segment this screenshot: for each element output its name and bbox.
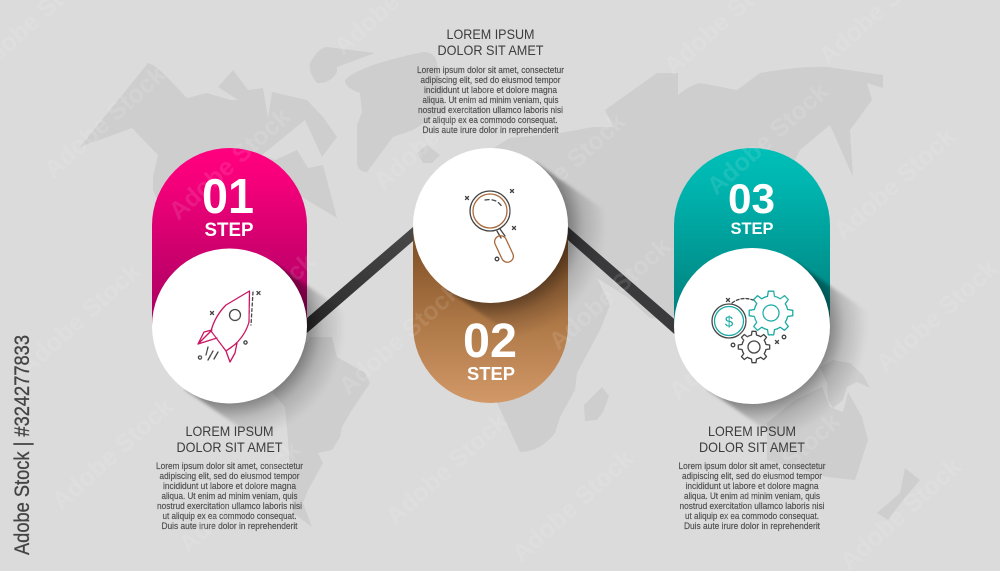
white circle: step 1 xyxy=(152,248,307,404)
text block: step 2: nostrud exercitation ullamco laboris nisi xyxy=(418,104,563,115)
pill: step 3 teal xyxy=(674,148,830,326)
text block: step 1: Duis aute irure dolor in reprehenderit xyxy=(162,520,298,531)
text block: step 1: DOLOR SIT AMET xyxy=(176,439,283,455)
text block: step 3: aliqua. Ut enim ad minim veniam, quis xyxy=(684,490,820,501)
text block: step 3: Lorem ipsum dolor sit amet, consectetur xyxy=(678,460,826,471)
text block: step 1: incididunt ut labore et dolore magna xyxy=(163,480,297,491)
watermarks: Adobe Stock xyxy=(499,107,631,231)
text block: step 3: LOREM IPSUM xyxy=(708,423,796,439)
text block: step 1 xyxy=(156,423,303,531)
connector lines xyxy=(300,220,680,339)
text block: step 3: incididunt ut labore et dolore magna xyxy=(686,480,819,491)
text block: step 1: LOREM IPSUM xyxy=(186,423,274,439)
watermarks: Adobe Stock xyxy=(174,435,306,559)
text block: step 2: aliqua. Ut enim ad minim veniam, quis xyxy=(422,94,559,105)
long shadow: step 2 xyxy=(446,162,658,374)
text block: step 3 xyxy=(678,423,826,531)
text block: step 3: nostrud exercitation ullamco laboris nisi xyxy=(680,500,824,511)
stock id label: Adobe Stock | #324277833 xyxy=(11,335,34,555)
icon: gears and coin xyxy=(712,291,793,363)
white circle: step 2 xyxy=(413,148,568,303)
watermarks: Adobe Stock xyxy=(369,72,501,196)
text block: step 2: DOLOR SIT AMET xyxy=(438,42,544,58)
watermarks: Adobe Stock xyxy=(334,277,466,401)
long shadow: step 3 xyxy=(708,262,920,475)
watermarks: Adobe Stock xyxy=(189,247,321,371)
icon: rocket xyxy=(198,291,260,362)
panel: step 3 xyxy=(674,148,920,475)
text block: step 1: adipiscing elit, sed do eiusmod tempor xyxy=(160,470,300,481)
text block: step 2 xyxy=(417,26,564,135)
watermarks: Adobe Stock xyxy=(544,232,676,356)
label: step: STEP xyxy=(467,363,515,384)
text block: step 1: ut aliquip ex ea commodo consequat. xyxy=(162,510,296,521)
label: step: STEP xyxy=(204,219,254,241)
watermarks: Adobe Stock xyxy=(47,392,179,516)
white circle: step 3 xyxy=(674,248,830,404)
text block: step 2: Lorem ipsum dolor sit amet, consectetur xyxy=(417,64,564,75)
text block: step 2: incididunt ut labore et dolore magna xyxy=(424,84,558,95)
text block: step 3: ut aliquip ex ea commodo consequat. xyxy=(685,510,819,521)
watermarks: Adobe Stock xyxy=(14,257,146,381)
text block: step 1: nostrud exercitation ullamco laboris nisi xyxy=(157,500,302,511)
watermarks: Adobe Stock xyxy=(664,282,796,406)
text block: step 3: Duis aute irure dolor in reprehenderit xyxy=(684,520,820,531)
long shadow: step 1 xyxy=(185,262,397,475)
text block: step 1: aliqua. Ut enim ad minim veniam, quis xyxy=(162,490,298,501)
watermarks: Adobe Stock xyxy=(507,444,639,568)
number: 01: 01 xyxy=(202,170,254,224)
watermarks: Adobe Stock xyxy=(714,407,846,531)
watermarks: Adobe Stock xyxy=(39,60,171,184)
text block: step 2: ut aliquip ex ea commodo consequat. xyxy=(424,114,558,125)
text block: step 3: DOLOR SIT AMET xyxy=(699,439,805,455)
text block: step 1: Lorem ipsum dolor sit amet, consectetur xyxy=(156,460,303,471)
watermarks: Adobe Stock xyxy=(702,77,834,201)
world map xyxy=(80,47,920,527)
pill: step 1 magenta xyxy=(152,148,307,326)
pill: step 2 brown xyxy=(413,226,568,403)
watermarks: Adobe Stock xyxy=(829,122,961,246)
text block: step 2: adipiscing elit, sed do eiusmod tempor xyxy=(420,74,560,85)
text block: step 2: Duis aute irure dolor in reprehenderit xyxy=(422,124,559,135)
text block: step 3: adipiscing elit, sed do eiusmod tempor xyxy=(682,470,822,481)
icon: magnifying glass xyxy=(466,190,516,264)
number: 02: 02 xyxy=(463,315,517,368)
label: step: STEP xyxy=(730,219,774,238)
watermarks: Adobe Stock xyxy=(871,254,1000,378)
watermarks: Adobe Stock xyxy=(381,407,513,531)
number: 03: 03 xyxy=(728,175,775,222)
text block: step 2: LOREM IPSUM xyxy=(446,26,534,42)
panel: step 1 xyxy=(152,148,397,475)
watermarks: Adobe Stock xyxy=(164,102,296,226)
panel: step 2 xyxy=(413,148,658,403)
icon: gears and coin: $ xyxy=(725,314,734,330)
